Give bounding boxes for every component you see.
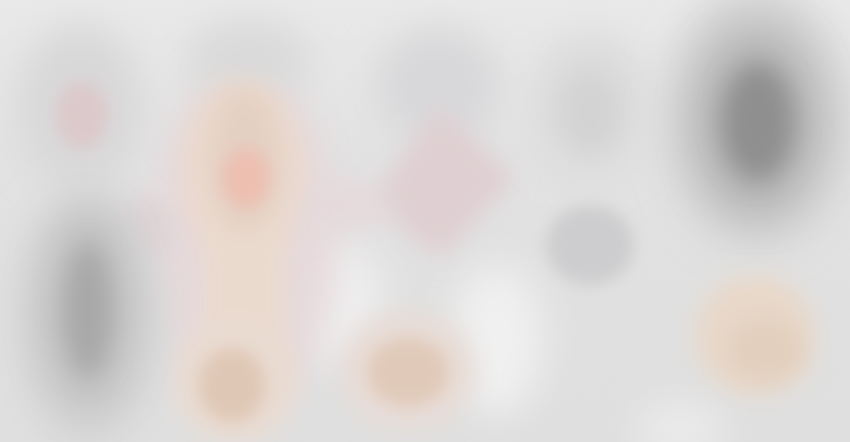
blob: tall peach column xyxy=(181,80,305,380)
blob: lower middle tan xyxy=(340,312,476,428)
blob: dark lower left xyxy=(16,185,160,442)
blob: mid gray xyxy=(546,205,634,285)
blob: lower peach xyxy=(173,318,297,442)
blob: upper gray xyxy=(532,33,648,177)
blob: dark top right xyxy=(665,0,849,248)
white blob: bottom right xyxy=(635,402,725,442)
blob: pink diamond xyxy=(380,105,515,255)
blob: top-left pink xyxy=(18,23,142,187)
blob: pink halo around the peach column xyxy=(115,65,410,415)
blob: top gray cap xyxy=(186,18,310,102)
white blob: lower middle-right xyxy=(451,265,543,415)
blob: tan bottom right xyxy=(695,275,815,395)
white blob: lower middle-left xyxy=(278,238,382,362)
blob: top middle gray xyxy=(376,27,500,143)
